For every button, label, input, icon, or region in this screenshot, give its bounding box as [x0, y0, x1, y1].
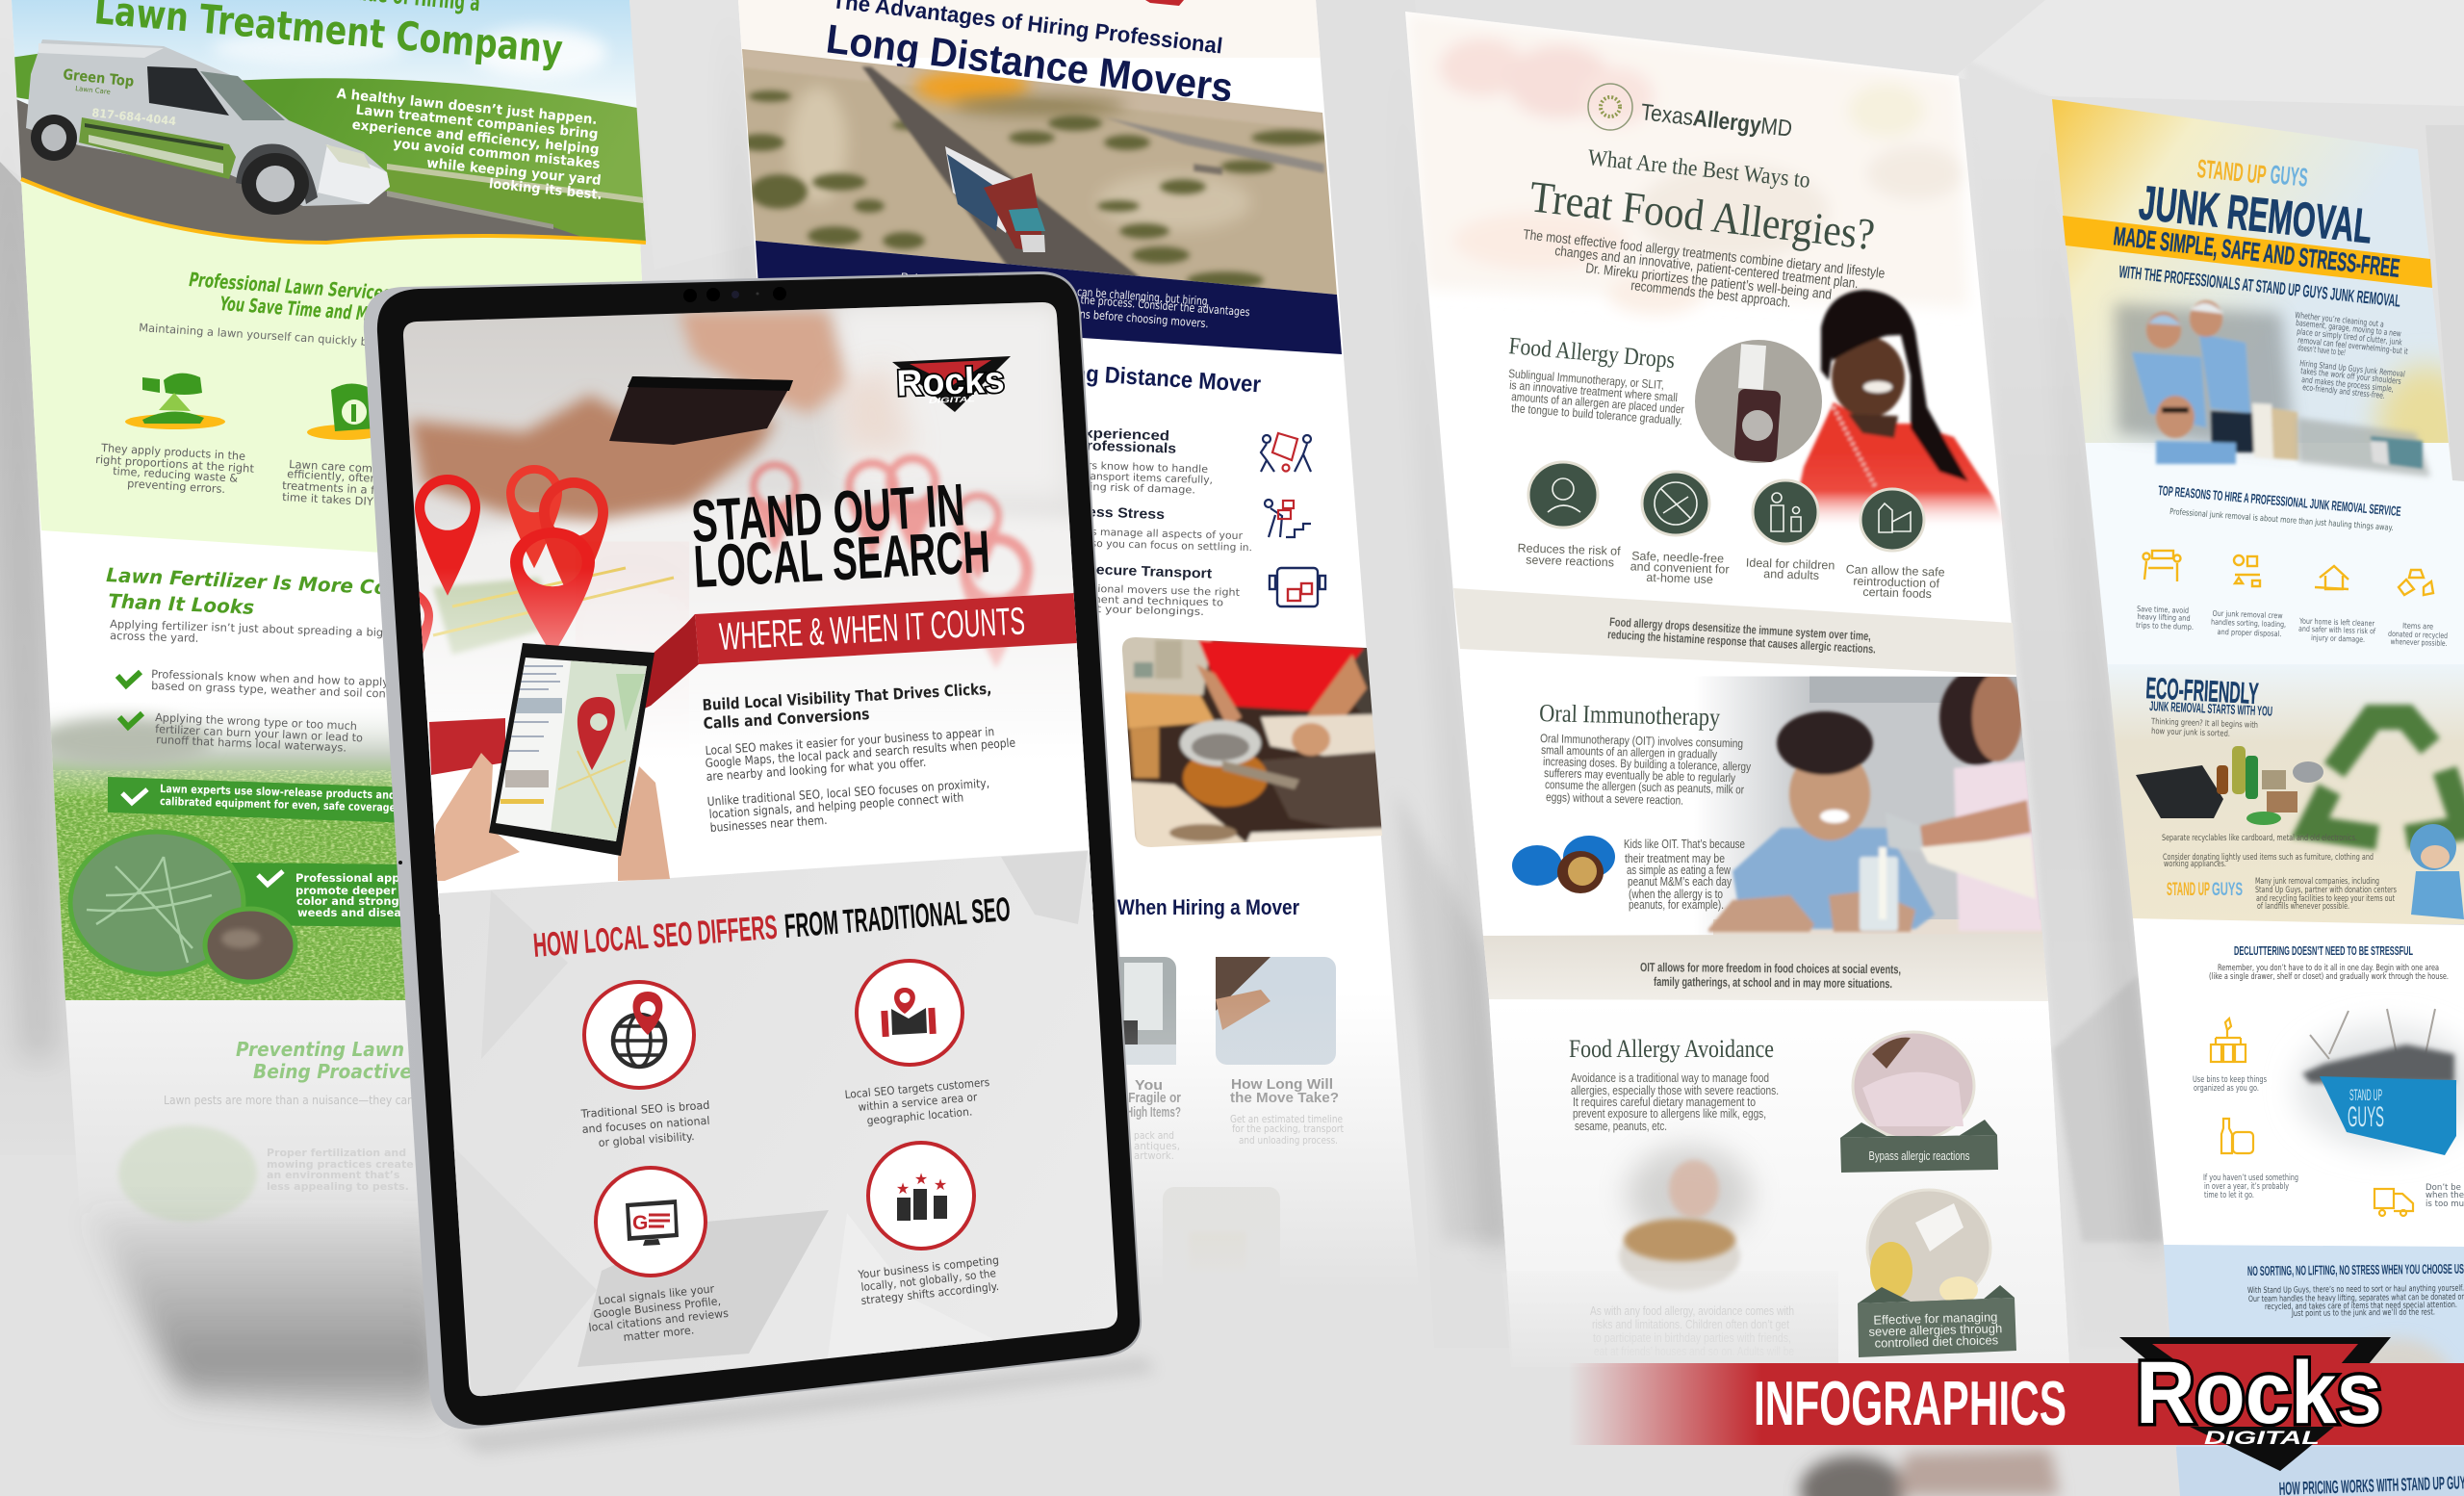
question cards: pack and — [1134, 1130, 1174, 1142]
junk intro text: Whether you’re cleaning out a — [2295, 311, 2384, 330]
icons: drop benefits: and convenient for — [1630, 559, 1730, 577]
screen: intro copy: Calls and Conversions — [703, 705, 870, 733]
section: food allergy avoidance — [1489, 999, 2069, 1367]
photo: sorted junk — [2136, 746, 2323, 825]
icons: drop benefits: reintroduction of — [1853, 575, 1940, 590]
question cards: Get an estimated timeline — [1230, 1114, 1343, 1125]
lawn section: grass callouts: promote deeper roots, richer — [295, 884, 477, 897]
oral immunotherapy text: sufferers may eventually be able to regularly — [1544, 766, 1736, 785]
allergy intro text: Dr. Mireku priortizes the patient’s well-being and — [1585, 261, 1833, 303]
junk intro text: basement, garage, moving to a new — [2296, 319, 2401, 339]
icon: hand and warning — [125, 374, 225, 429]
question cards: the Move Take? — [1230, 1090, 1339, 1106]
callout: effective for managing: severe allergies through — [1868, 1321, 2002, 1339]
logo: TexasAllergyMD — [1588, 84, 1793, 142]
lawn intro text: Lawn treatment companies bring — [355, 102, 599, 142]
allergy title — [1527, 145, 1877, 259]
lawn section: preventing pests (faded): Lawn pests are more than a nuisance—they can — [164, 1094, 414, 1107]
section: eco friendly: Separate recyclables like cardboard, metal and old electronics. — [2162, 834, 2357, 843]
navy intro band: Between — [901, 271, 946, 284]
callout: effective for managing — [1858, 1190, 2016, 1357]
section: eco friendly: GUYS — [2212, 880, 2243, 900]
lawn section: save time: preventing errors. — [127, 477, 225, 496]
oral immunotherapy text — [1512, 699, 1752, 912]
lawn section: save time: time it takes DIY homeowners. — [282, 490, 452, 512]
lawn section: grass callouts: calibrated equipment for even, safe coverage — [160, 794, 396, 814]
benefit list: protect your belongings. — [1059, 603, 1204, 618]
icon: mover on stairs — [1265, 500, 1311, 537]
icons: drop benefits: Ideal for children — [1746, 556, 1835, 572]
oral immunotherapy text: (when the allergy is to — [1629, 888, 1723, 901]
lawn section: preventing pests (faded): less appealing to pests. — [267, 1180, 409, 1193]
allergy intro text: recommends the best approach. — [1630, 278, 1791, 311]
band: OIT summary — [1483, 934, 2048, 1001]
screen: intro copy — [702, 680, 1016, 835]
allergy title: What Are the Best Ways to — [1586, 145, 1811, 193]
section: eco friendly: Consider donating lightly used items such as furniture, clothing and — [2163, 853, 2374, 863]
question cards — [1088, 957, 1344, 1298]
icon circle: ranking stars: ★ — [914, 1170, 928, 1188]
photo: drops bottle — [1694, 339, 1823, 464]
lawn intro text — [336, 87, 603, 203]
oral immunotherapy text: their treatment may be — [1625, 852, 1725, 865]
allergy intro text — [1523, 227, 1886, 311]
section: food allergy drops: is an innovative treatment where small — [1509, 378, 1678, 404]
screen: intro copy: Google Maps, the local pack and search results when people — [705, 735, 1016, 770]
section: food allergy avoidance: Avoidance is a traditional way to manage food — [1571, 1071, 1769, 1085]
red banner: infographics — [1568, 1363, 2464, 1445]
icons: drop benefits: at-home use — [1646, 571, 1713, 586]
callout: effective for managing: controlled diet choices — [1874, 1332, 1999, 1351]
lawn section: save time: They apply products in the — [100, 441, 245, 463]
section: food allergy avoidance: Food Allergy Avoidance — [1569, 1035, 1774, 1063]
lawn section: grass callouts — [70, 777, 477, 982]
lawn section: save time: Lawn care companies work — [289, 457, 440, 478]
section: eco friendly: working appliances. — [2164, 860, 2226, 869]
panel: food allergies infographic — [1405, 12, 2069, 1496]
benefit list: Experienced — [1073, 426, 1169, 444]
icon circle: ranking stars — [868, 1143, 974, 1249]
screen: intro copy: location signals, and helping people connect with — [708, 789, 964, 821]
junk intro text: doesn’t have to be! — [2297, 344, 2346, 358]
section: food allergy drops: Food Allergy Drops — [1507, 333, 1676, 374]
lawn section: fertilizer: Than It Looks — [108, 589, 255, 619]
icon circle: google business — [596, 1168, 706, 1276]
section: oral immunotherapy photo — [1460, 676, 2042, 936]
benefit list: reducing risk of damage. — [1059, 480, 1195, 496]
section: top reasons: and safer with less risk of — [2298, 625, 2375, 635]
benefit list: Movers manage all aspects of your — [1059, 526, 1244, 542]
section: top reasons: Save time, avoid — [2137, 605, 2189, 615]
section: eco friendly: of landfills whenever possible. — [2257, 902, 2349, 912]
lawn section: fertilizer: based on grass type, weather and soil conditions. — [151, 679, 426, 702]
illustration: mascot — [2410, 824, 2464, 919]
screen: captions: Your business is competing — [857, 1253, 1000, 1281]
oral immunotherapy text: Kids like OIT. That’s because — [1624, 838, 1745, 851]
section: decluttering: If you haven’t used something — [2203, 1174, 2298, 1183]
screen: intro copy: are nearby and looking for what you offer. — [706, 755, 927, 784]
band: OIT summary: family gatherings, at school and in may more situations. — [1654, 974, 1892, 991]
lawn section: fertilizer: Applying the wrong type or too much — [155, 710, 357, 733]
screen: captions: and focuses on national — [581, 1114, 710, 1136]
lawn intro text: while keeping your yard — [426, 156, 602, 189]
section: top reasons: Professional junk removal is about more than just hauling things away. — [2169, 507, 2394, 533]
lawn section: preventing pests (faded): Being Proactive — [253, 1060, 412, 1083]
icon: bins — [2211, 1019, 2246, 1062]
screen: rocks digital logo: DIGITAL — [929, 395, 975, 405]
van illustration — [26, 39, 390, 215]
junk intro text: takes the work off your shoulders — [2300, 367, 2402, 387]
heading: when hiring a mover: Questions to Ask When Hiring a Mover — [962, 895, 1299, 919]
icons: drop benefits: Can allow the safe — [1846, 562, 1945, 580]
benefit list: move so you can focus on settling in. — [1059, 537, 1252, 554]
fruit backdrop — [1405, 12, 1968, 315]
lawn section: grass callouts: Professional applications — [295, 871, 452, 885]
junk intro text: Hiring Stand Up Guys Junk Removal — [2299, 359, 2405, 379]
band: drops summary: reducing the histamine response that causes allergic reactions. — [1607, 628, 1876, 657]
panel: junk removal infographic — [2040, 87, 2464, 1496]
lawn section: save time: right proportions at the right — [95, 452, 255, 476]
red banner: infographics: INFOGRAPHICS — [1754, 1368, 2066, 1438]
junk title: GUYS — [2269, 160, 2309, 193]
screen: captions: geographic location. — [866, 1104, 973, 1127]
oral immunotherapy text: Oral Immunotherapy — [1539, 699, 1721, 732]
lawn section: save time: You Save Time and Money — [219, 292, 403, 327]
panel: lawn treatment infographic — [0, 0, 693, 1227]
screen: captions: or global visibility. — [598, 1129, 695, 1149]
van illustration: 817-684-4044 — [91, 106, 177, 128]
question cards: Have Fragile or — [1097, 1090, 1181, 1106]
band: drops summary: Food allergy drops desensitize the immune system over time, — [1609, 615, 1871, 643]
screen: ribbon — [429, 593, 1078, 775]
logo: rocks digital large — [2119, 1337, 2391, 1471]
benefit list: Movers know how to handle — [1059, 459, 1208, 476]
lawn section: save time: efficiently, often completing — [287, 467, 443, 488]
photo: doctor portrait — [1790, 290, 2007, 529]
panel shadows — [2, 0, 2166, 1251]
floor shadows — [87, 1213, 1155, 1454]
lawn section: grass callouts: color and stronger defenses — [296, 894, 473, 908]
icon circle: ranking stars: ★ — [896, 1179, 910, 1198]
section: top reasons: trips to the dump. — [2136, 621, 2194, 632]
lawn section: preventing pests (faded): an environment that’s — [267, 1169, 400, 1181]
section: eco friendly: Thinking green? It all begins with — [2150, 717, 2258, 731]
logo: rocks digital large: Rocks — [2136, 1344, 2382, 1442]
section: eco friendly: Many junk removal companies, including — [2255, 877, 2379, 887]
junk intro text — [2295, 311, 2409, 401]
tablet screen — [375, 298, 1126, 1406]
screen: headline — [690, 472, 991, 601]
oral immunotherapy text: increasing doses. By building a tolerance, allergy — [1543, 755, 1752, 774]
photo: blue dumpster: STAND UP — [2349, 1086, 2382, 1104]
section: food allergy avoidance: prevent exposure to allergens like milk, eggs, — [1573, 1107, 1766, 1121]
lawn section: grass callouts: weeds and diseases. — [297, 906, 426, 919]
benefit list: Secure Transport — [1086, 562, 1213, 582]
band: drops summary — [1453, 588, 2016, 675]
logo: TexasAllergyMD: TexasAllergyMD — [1639, 99, 1793, 142]
section: eco friendly: how your junk is sorted. — [2151, 727, 2230, 739]
section: food allergy avoidance: It requires careful dietary management to — [1573, 1096, 1756, 1109]
icon circle: globe pin — [584, 982, 694, 1088]
oral immunotherapy text: consume the allergen (such as peanuts, milk or — [1545, 778, 1744, 796]
benefit list — [1059, 426, 1252, 618]
section: top reasons: handles sorting, loading, — [2211, 618, 2286, 629]
icons: gold reasons — [2143, 551, 2433, 595]
section: top reasons: donated or recycled — [2388, 630, 2448, 640]
photo: junk crew — [2115, 300, 2430, 477]
oral immunotherapy text: eggs) without a severe reaction. — [1546, 790, 1683, 808]
section: eco friendly: ECO-FRIENDLY — [2145, 671, 2259, 710]
section: top reasons: whenever possible. — [2390, 637, 2448, 648]
section: decluttering: Use bins to keep things — [2193, 1075, 2267, 1085]
icons: drop benefits: severe reactions — [1526, 554, 1614, 569]
screen: section heading: FROM TRADITIONAL SEO — [783, 890, 1012, 945]
lawn section: save time: Professional Lawn Services — [189, 268, 392, 305]
screen: headline: STAND OUT IN — [690, 472, 966, 555]
lawn section: preventing pests (faded): Preventing Lawn — [236, 1038, 404, 1061]
icon: junk truck — [2374, 1189, 2413, 1216]
screen: headline: LOCAL SEARCH — [692, 519, 991, 601]
question cards: artwork. — [1134, 1150, 1174, 1162]
section: decluttering — [2193, 943, 2464, 1216]
icons: drop benefits: certain foods — [1862, 585, 1932, 601]
oral immunotherapy text: peanuts, for example). — [1629, 898, 1724, 912]
section: food allergy avoidance: allergies, especially those with severe reactions. — [1571, 1084, 1779, 1097]
question cards: for the packing, transport — [1232, 1123, 1344, 1135]
section: top reasons: Items are — [2402, 621, 2433, 632]
lawn section: preventing pests (faded): mowing practices create — [267, 1158, 414, 1171]
icon: movers carrying box — [1261, 433, 1311, 472]
screen: captions: locally, not globally, so the — [860, 1266, 997, 1294]
screen: intro copy: businesses near them. — [709, 812, 828, 835]
section: decluttering: organized as you go. — [2194, 1084, 2259, 1094]
icon circle: ranking stars: ★ — [934, 1175, 947, 1194]
section: food allergy drops: Sublingual Immunotherapy, or SLIT, — [1508, 367, 1664, 392]
section: food allergy drops — [1507, 333, 1684, 427]
icon: bottle and jar — [2221, 1119, 2253, 1153]
lawn section: fertilizer: Applying fertilizer isn’t just about spreading a big bag — [110, 617, 408, 640]
photo: blue dumpster: GUYS — [2348, 1101, 2384, 1133]
lawn section: save time — [95, 268, 452, 512]
section: top reasons: Your home is left cleaner — [2298, 617, 2375, 628]
lawn section: save time: treatments in a fraction of the — [282, 478, 449, 501]
yellow wave — [21, 179, 646, 243]
section: top reasons: and proper disposal. — [2217, 628, 2282, 638]
section: top reasons: Our junk removal crew — [2212, 609, 2283, 620]
callout: bypass allergic reactions — [1840, 1032, 1998, 1173]
truck — [945, 146, 1045, 252]
icon circle: local map pin — [857, 961, 962, 1065]
logo: rocks digital large: DIGITAL — [2204, 1429, 2320, 1449]
van illustration: Lawn Care — [75, 85, 111, 96]
question cards: You — [1135, 1077, 1163, 1094]
screen: captions: matter more. — [623, 1323, 695, 1344]
van illustration: Green Top — [63, 65, 135, 90]
lawn section: preventing pests (faded) — [65, 1000, 693, 1227]
section: decluttering: in over a year, it’s probably — [2204, 1182, 2289, 1192]
benefit list: and transport items carefully, — [1059, 470, 1213, 486]
icons: drop benefits: Safe, needle-free — [1631, 549, 1724, 566]
question cards: High Items? — [1126, 1104, 1181, 1121]
band: OIT summary: OIT allows for more freedom in food choices at social events, — [1640, 960, 1901, 976]
screen: captions: local citations and reviews — [588, 1306, 730, 1334]
heading: hiring a long distance mover: Hiring a Long Distance Mover — [962, 353, 1262, 398]
question cards: How Long Will — [1231, 1076, 1333, 1093]
icon: moving truck — [1270, 568, 1325, 606]
lawn intro text: you avoid common mistakes — [393, 136, 601, 172]
screen: ribbon tagline: WHERE & WHEN IT COUNTS — [718, 600, 1026, 658]
junk intro text: and makes the process simple, — [2301, 375, 2394, 395]
navy intro band — [756, 241, 1342, 354]
section: eco friendly: and recycling facilities to keep your items out — [2256, 894, 2395, 904]
screen: section heading: HOW LOCAL SEO DIFFERS — [532, 909, 779, 965]
lawn section: fertilizer — [106, 563, 496, 755]
oral immunotherapy text: Oral Immunotherapy (OIT) involves consuming — [1540, 732, 1743, 751]
section: food allergy avoidance: risks and limitations. Children often don’t get — [1592, 1317, 1789, 1331]
section: eco friendly: Stand Up Guys, partner with donation centers — [2255, 886, 2397, 895]
lawn section: fertilizer: Professionals know when and how to apply — [151, 667, 389, 689]
photo: blue dumpster — [2296, 1009, 2464, 1155]
section: food allergy avoidance: to participate in birthday parties with friends, — [1593, 1330, 1791, 1345]
lawn section: fertilizer: Lawn Fertilizer Is More Complicated — [106, 563, 496, 604]
tablet body — [364, 271, 1142, 1429]
screen: intro copy: Unlike traditional SEO, local SEO focuses on proximity, — [706, 776, 990, 809]
screen: captions: strategy shifts accordingly. — [860, 1279, 1000, 1307]
icon circle: google business: G — [632, 1212, 648, 1234]
lawn section: save time: time, reducing waste & — [113, 464, 238, 485]
junk title — [2063, 154, 2432, 311]
navy intro band: and ask the right questions before choosing movers. — [962, 298, 1209, 330]
icon: check marks — [117, 672, 142, 727]
junk intro text: eco-friendly and stress-free. — [2302, 383, 2385, 401]
navy intro band: professionals can simplify the process. Consider the advantages — [962, 284, 1250, 319]
section: food allergy drops: amounts of an allergen are placed under — [1511, 390, 1684, 416]
lawn intro text: experience and efficiency, helping — [351, 117, 600, 158]
section: eco friendly — [2136, 671, 2464, 919]
desert highway photo — [742, 49, 1337, 295]
oral immunotherapy text: peanut M&M’s each day — [1628, 875, 1732, 889]
callout: bypass allergic reactions: Bypass allergic reactions — [1869, 1148, 1970, 1163]
section: food allergy avoidance: sesame, peanuts, etc. — [1575, 1120, 1667, 1133]
icon: fertilizer bag — [307, 383, 384, 440]
photo: nuts bowl — [1619, 1146, 1752, 1291]
allergy title: Treat Food Allergies? — [1527, 171, 1877, 259]
lawn section: save time: Maintaining a lawn yourself can quickly become — [139, 321, 405, 350]
benefit list: Professionals — [1076, 438, 1176, 457]
screen: captions: within a service area or — [858, 1090, 978, 1114]
junk intro text: removal can feel overwhelming–but it — [2297, 336, 2409, 357]
junk title: STAND UP — [2195, 154, 2268, 190]
icons: drop benefits: Reduces the risk of — [1517, 541, 1621, 558]
icon: peanut candies — [1512, 836, 1615, 893]
section: eco friendly: JUNK REMOVAL STARTS WITH YOU — [2149, 698, 2272, 719]
allergy intro text: changes and an innovative, patient-centered treatment plan. — [1554, 244, 1859, 292]
question cards: and unloading process. — [1239, 1135, 1338, 1147]
navy intro band: Relocating long distances can be challenging, but hiring — [962, 276, 1208, 308]
section: food allergy avoidance: eat at friends’ houses and so on. Adults will be — [1594, 1344, 1794, 1358]
lawn intro text: looking its best. — [488, 176, 603, 203]
screen: captions: Google Business Profile, — [593, 1294, 722, 1321]
faded photo below banner — [1800, 1449, 2060, 1496]
graphic: green recycle symbol — [2310, 717, 2464, 838]
screen: intro copy: Build Local Visibility That Drives Clicks, — [702, 680, 992, 714]
photo: packing pots — [1122, 637, 1382, 847]
grey section — [439, 850, 1126, 1406]
screen: captions — [579, 1075, 1000, 1344]
movers title: Long Distance Movers — [824, 15, 1235, 111]
callout: effective for managing: Effective for managing — [1873, 1309, 1998, 1328]
screen: captions: Local SEO targets customers — [844, 1075, 990, 1101]
section: top reasons: heavy lifting and — [2137, 612, 2191, 623]
screen: captions: Local signals like your — [598, 1281, 715, 1307]
lawn section: fertilizer: fertilizer can burn your lawn or lead to — [155, 722, 363, 744]
lawn intro text: A healthy lawn doesn’t just happen. — [336, 87, 598, 128]
section: food allergy avoidance: As with any food allergy, avoidance comes with — [1590, 1303, 1794, 1318]
tablet mockup — [364, 271, 1142, 1429]
map pins — [375, 454, 1033, 721]
lawn section: preventing pests (faded): Proper fertilization and — [267, 1147, 406, 1159]
section: decluttering: time to let it go. — [2204, 1191, 2254, 1200]
allergy intro text: The most effective food allergy treatments combine dietary and lifestyle — [1523, 227, 1886, 282]
lawn header photo — [0, 0, 674, 250]
lawn section: fertilizer: across the yard. — [110, 629, 199, 645]
section: eco friendly: STAND UP — [2167, 880, 2210, 900]
screen: captions: Traditional SEO is broad — [579, 1098, 710, 1121]
hero photo — [395, 298, 1126, 915]
question cards: antiques, — [1134, 1141, 1180, 1152]
panel: long distance movers infographic — [738, 0, 1414, 1234]
benefit list: Professional movers use the right — [1059, 582, 1240, 599]
junk intro text: place or simply tired of clutter, junk — [2297, 327, 2402, 348]
icons: drop benefits: and adults — [1763, 567, 1819, 582]
screen: intro copy: Local SEO makes it easier for your business to appear in — [705, 724, 995, 758]
oral immunotherapy text: as simple as eating a few — [1627, 864, 1732, 877]
benefit list: equipment and techniques to — [1059, 593, 1223, 608]
section: top reasons: injury or damage. — [2311, 633, 2365, 644]
section: top reasons — [2136, 482, 2448, 648]
benefit list: Less Stress — [1078, 504, 1165, 523]
section: no sorting — [2247, 1261, 2464, 1496]
lawn section: grass callouts: Lawn experts use slow-release products and — [160, 782, 396, 802]
lawn section: fertilizer: runoff that harms local waterways. — [156, 733, 346, 755]
screen: small tablet and hands — [428, 643, 670, 881]
screen: rocks digital logo: Rocks — [896, 360, 1005, 404]
oral immunotherapy text: small amounts of an allergen in gradually — [1541, 743, 1718, 761]
section: food allergy drops: the tongue to build tolerance gradually. — [1511, 401, 1682, 427]
icons: drop benefits — [1517, 462, 1945, 601]
